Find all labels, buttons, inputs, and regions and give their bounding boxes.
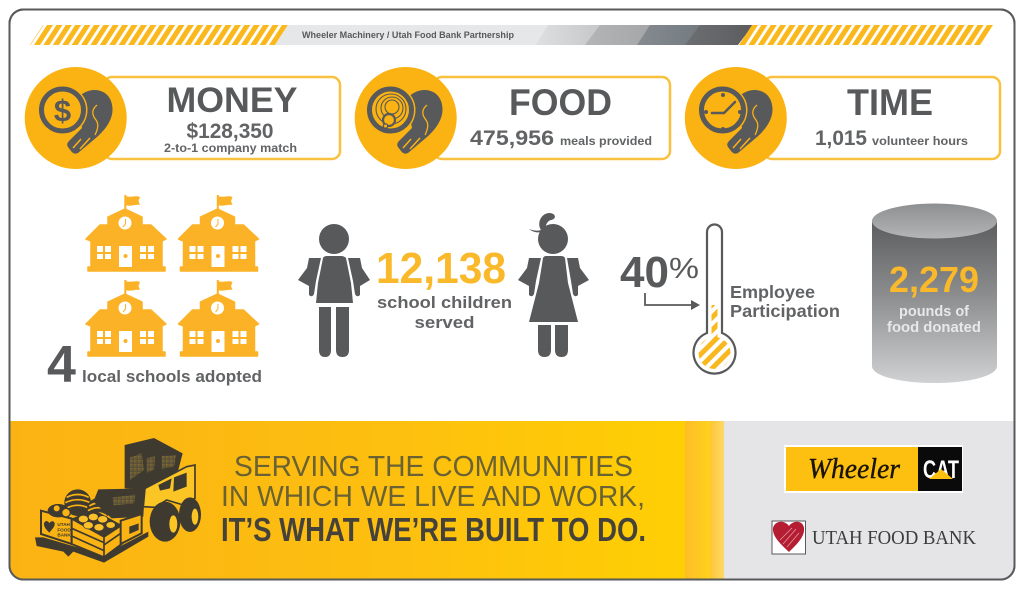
grey ribbon: [275, 25, 753, 45]
icon: money in hand: $: [54, 93, 71, 128]
statistic: school children number: 12,138: [376, 244, 506, 293]
loader arm: [143, 465, 195, 507]
icon: food can in hand: [355, 67, 457, 169]
school children label: school children: [377, 293, 512, 312]
banner headline: IN WHICH WE LIVE AND WORK,: [221, 481, 645, 513]
food meals stat: 475,956: [470, 127, 554, 150]
food donated cylinder: [872, 204, 997, 383]
money card outline: [104, 77, 340, 159]
food card outline: [434, 77, 670, 159]
money note: 2-to-1 company match: [164, 141, 297, 155]
logo: Utah Food Bank: [772, 521, 976, 554]
participation percent: %: [669, 253, 699, 285]
children stat: [298, 213, 589, 357]
banner headline: SERVING THE COMMUNITIES: [234, 451, 633, 483]
food meals stat: [470, 127, 652, 150]
banner background: [10, 421, 724, 579]
icon: money in hand: [25, 67, 127, 169]
crate left: [41, 511, 72, 544]
logo: Wheeler CAT: CAT: [923, 456, 959, 484]
logo: Utah Food Bank: UTAH FOOD BANK: [812, 527, 976, 549]
logos background: [724, 421, 1014, 579]
participation stat: [620, 224, 840, 374]
pounds label: [887, 304, 981, 336]
money amount: $128,350: [186, 120, 274, 143]
right hazard stripes: [737, 25, 995, 45]
statistic: pounds number: 2,279: [889, 259, 979, 300]
schools label: local schools adopted: [82, 367, 262, 386]
participation label: Participation: [730, 301, 840, 321]
panel: money: [25, 67, 340, 169]
time heading: TIME: [847, 82, 933, 123]
icon: boy with backpack: [298, 224, 370, 357]
logo: Wheeler CAT: Wheeler: [808, 453, 901, 485]
banner headline: IT’S WHAT WE’RE BUILT TO DO.: [221, 511, 646, 548]
icon: skid steer loader with food crates: [35, 438, 201, 563]
arrow: [645, 293, 700, 310]
panel: food: [355, 67, 670, 169]
ribbon title: Wheeler Machinery / Utah Food Bank Partnership: [302, 30, 514, 41]
participation label: Employee: [730, 282, 815, 302]
apples: [48, 504, 69, 517]
header ribbon: [30, 25, 995, 45]
panel: logos: [724, 421, 1014, 579]
rear crate: [121, 514, 142, 544]
participation label: [730, 282, 840, 321]
left hazard stripes: [30, 25, 288, 45]
icon: skid steer loader with food crates: BANK: [57, 533, 71, 538]
panel: yellow banner: [10, 421, 724, 579]
cylinder body: [872, 221, 997, 383]
pallet: [35, 532, 148, 563]
time hours stat: [815, 127, 968, 150]
wheels: [179, 497, 201, 532]
crate main: [72, 519, 122, 557]
banner headline: [221, 451, 646, 548]
food meals stat: meals provided: [560, 134, 652, 148]
pounds label: pounds of: [899, 304, 969, 320]
time hours stat: volunteer hours: [872, 134, 968, 148]
melons: [64, 489, 91, 516]
icon: four schools: [86, 195, 258, 356]
icon: girl with backpack: [518, 213, 589, 357]
schools number: 4: [47, 336, 76, 394]
participation percent: 40: [620, 248, 669, 297]
cylinder top: [872, 204, 997, 238]
time hours stat: 1,015: [815, 127, 867, 150]
logo: Wheeler CAT: [784, 445, 963, 493]
time card outline: [764, 77, 1000, 159]
schools stat: [47, 195, 262, 394]
icon: skid steer loader with food crates: UTAH: [57, 522, 71, 527]
bucket: [93, 488, 145, 518]
money heading: MONEY: [166, 81, 298, 120]
icon: thermometer: [694, 224, 736, 374]
crate produce: [78, 513, 115, 531]
panel: time: [685, 67, 1000, 169]
icon: clock in hand: [685, 67, 787, 169]
pounds label: food donated: [887, 320, 981, 336]
school children label: served: [414, 313, 474, 332]
participation percent: [620, 248, 699, 297]
school children label: [377, 293, 512, 332]
icon: skid steer loader with food crates: FOOD: [57, 527, 71, 532]
cab: [125, 438, 183, 490]
food heading: FOOD: [509, 82, 612, 123]
